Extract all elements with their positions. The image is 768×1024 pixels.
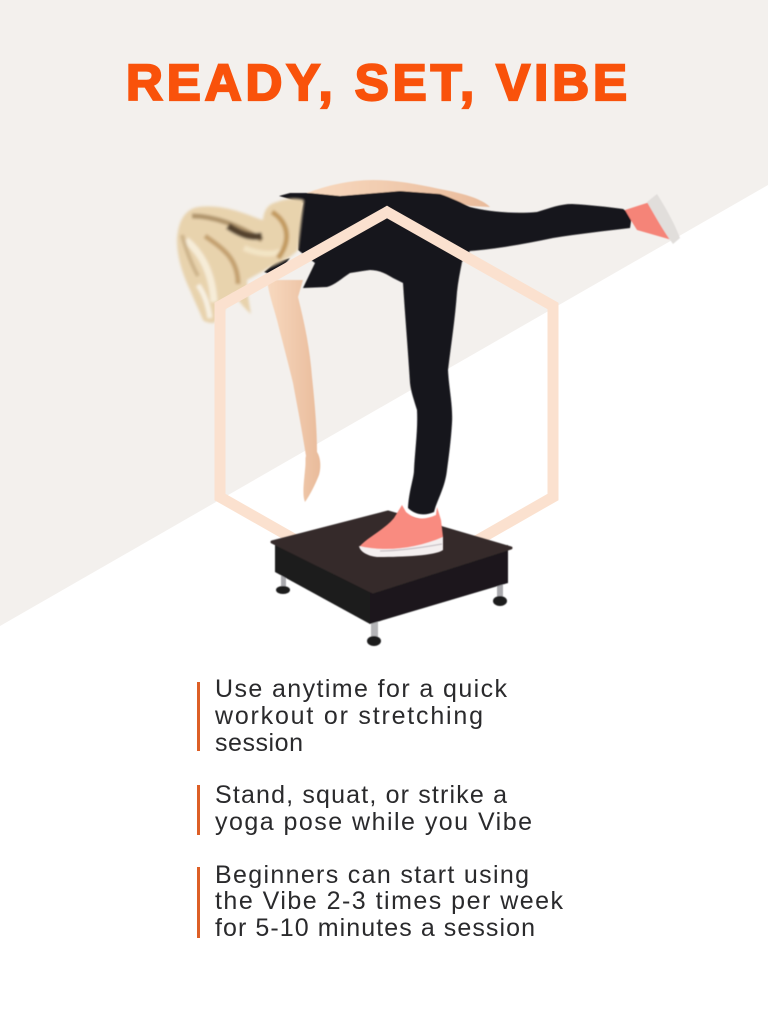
shirt strap	[264, 258, 290, 276]
accent bar	[197, 682, 200, 751]
background: beige diagonal panel	[0, 0, 768, 626]
text lines: Stand, squat, or strike a	[215, 781, 507, 809]
raised arm along back	[307, 180, 490, 207]
hanging arm and hand	[267, 280, 320, 502]
platform right foot	[493, 583, 507, 606]
text lines	[215, 781, 532, 836]
figure: woman balancing	[177, 180, 680, 514]
text lines: for 5-10 minutes a session	[215, 914, 535, 942]
text lines	[214, 675, 508, 757]
platform base	[275, 540, 370, 624]
text block: quick workout	[197, 675, 508, 757]
text lines: Beginners can start using	[215, 861, 529, 889]
title: READY, SET, VIBE	[126, 54, 627, 111]
text lines: Use anytime for a quick	[215, 675, 508, 703]
black top and leggings	[279, 191, 632, 514]
text lines	[215, 861, 564, 942]
accent bar	[197, 867, 200, 938]
platform left foot	[276, 575, 290, 594]
accent bar	[197, 785, 200, 835]
text lines: yoga pose while you Vibe	[215, 808, 532, 836]
platform front foot	[367, 620, 381, 646]
hair	[177, 199, 304, 323]
platform top	[272, 512, 511, 592]
vibration platform	[272, 512, 511, 646]
text lines: the Vibe 2-3 times per week	[215, 887, 564, 915]
text lines: session	[215, 729, 303, 757]
text block: beginners	[197, 861, 564, 942]
text lines: workout or stretching	[214, 702, 483, 730]
text block: poses	[197, 781, 532, 836]
hexagon outline	[220, 212, 553, 592]
standing shoe	[359, 505, 443, 557]
raised shoe	[625, 194, 680, 244]
